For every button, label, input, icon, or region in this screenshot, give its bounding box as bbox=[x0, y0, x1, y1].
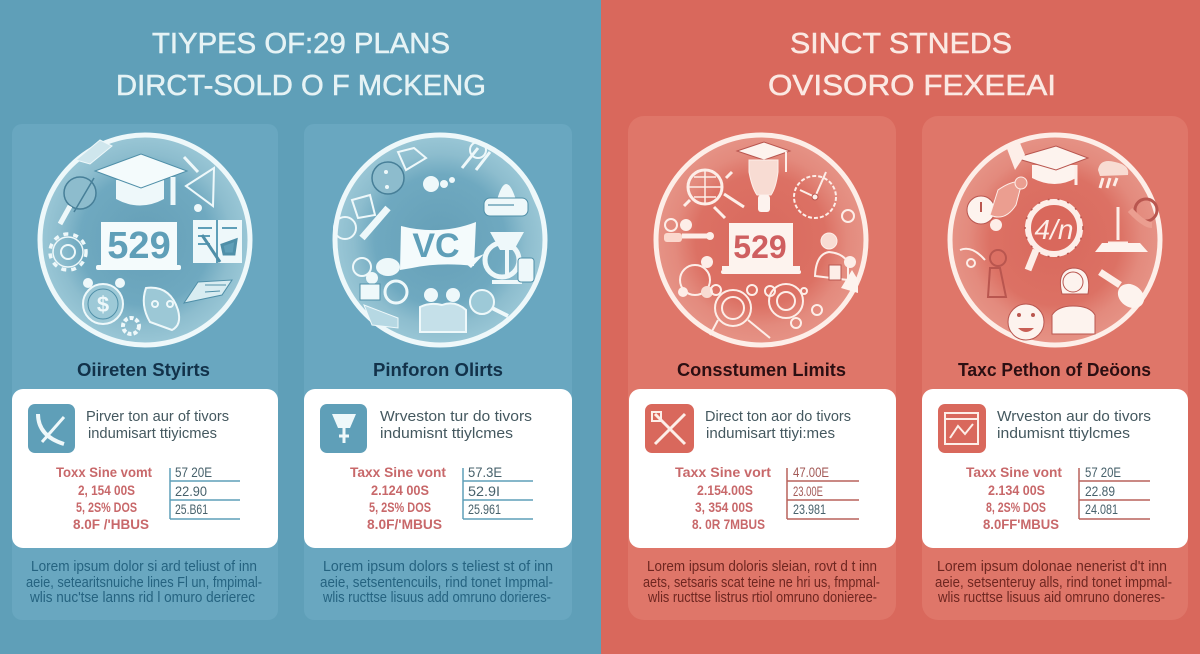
icon: clock wheel bbox=[794, 172, 836, 218]
heading: Consstumen Limits bbox=[677, 360, 846, 380]
mini table: 52.9I bbox=[468, 483, 500, 499]
red background half bbox=[601, 0, 1200, 654]
icon: people and chat bbox=[353, 258, 407, 328]
figures list: 5, 2S% DOS bbox=[369, 499, 431, 515]
icon: magnifier percent bbox=[1025, 199, 1083, 270]
icon: chart window tile bbox=[938, 404, 986, 453]
heading: Oiireten Styirts bbox=[77, 360, 210, 380]
card text bbox=[705, 408, 851, 442]
card text bbox=[86, 408, 229, 442]
icon: dollar coin: $ bbox=[97, 292, 109, 317]
mini table: 22.90 bbox=[175, 483, 207, 499]
title: left: TIYPES OF:29 PLANS bbox=[152, 28, 450, 60]
heading: Pinforon Olirts bbox=[373, 360, 503, 380]
figures list: Toxx Sine vomt bbox=[56, 464, 152, 480]
title: right: OVISORO FEXEEAI bbox=[768, 70, 1056, 102]
mini table bbox=[170, 464, 240, 519]
figures list: 2.134 00S bbox=[988, 482, 1045, 498]
figures list: 2.124 00S bbox=[371, 482, 429, 498]
figures list: Taxx Sine vort bbox=[675, 464, 771, 480]
card text: Pirver ton aur of tivors bbox=[86, 408, 229, 425]
medallion: 529 advisor icons bbox=[656, 135, 866, 345]
description bbox=[643, 559, 880, 606]
icon: people with hand bbox=[664, 219, 714, 242]
panel: advisor-sold 2 bbox=[922, 116, 1188, 620]
mini table bbox=[463, 464, 533, 519]
icon: magnifier percent: 4/n bbox=[1035, 214, 1073, 245]
icon: VC flag: VC bbox=[412, 227, 460, 265]
panel: advisor-sold 1 bbox=[628, 116, 896, 620]
card: details bbox=[12, 389, 278, 548]
icon: monument bbox=[1095, 199, 1157, 252]
icon: cap on bulb bbox=[737, 142, 790, 212]
figures list: 8, 2S% DOS bbox=[986, 499, 1046, 515]
icon: face mascot bbox=[144, 288, 179, 330]
mini table: 25.B61 bbox=[175, 501, 208, 517]
icon: laptop 529 bbox=[96, 222, 181, 270]
figures list bbox=[675, 464, 771, 532]
figures list: 3, 354 00S bbox=[695, 499, 753, 515]
icon: compass triangle bbox=[76, 140, 214, 212]
icon: lens bbox=[470, 290, 508, 316]
heading: Taxc Pethon of Deöons bbox=[958, 360, 1151, 380]
panel: direct-sold 1 bbox=[12, 124, 278, 620]
description: wlis ructtse lisuus add omruno dorieres- bbox=[322, 590, 551, 606]
description: Lorem ipsum dolors s teliest st of inn bbox=[323, 559, 553, 575]
figures list bbox=[966, 464, 1062, 532]
mini table: 47.00E bbox=[793, 464, 829, 480]
icon: gear bbox=[50, 234, 86, 270]
title: left bbox=[116, 28, 486, 102]
card text: Direct ton aor do tivors bbox=[705, 408, 851, 425]
panel: direct-sold 2 bbox=[304, 124, 572, 620]
figures list: 2.154.00S bbox=[697, 482, 753, 498]
card text: indumisart ttiyicmes bbox=[88, 425, 217, 442]
mini table bbox=[787, 464, 859, 519]
figures list: Taxx Sine vont bbox=[966, 464, 1062, 480]
icon: person gear bbox=[765, 284, 822, 328]
card text bbox=[380, 408, 532, 442]
card text: indumisnt ttiylcmes bbox=[380, 425, 513, 442]
card: details bbox=[922, 389, 1188, 548]
icon: phone tile bbox=[28, 404, 75, 453]
icon: globe bbox=[372, 148, 426, 194]
icon: bottle bbox=[1100, 272, 1149, 313]
icon: notebook bbox=[193, 220, 242, 263]
figures list: Taxx Sine vont bbox=[350, 464, 446, 480]
description: wlis nuc'tse lanns rid l omuro derierec bbox=[29, 590, 255, 606]
icon: cluster bbox=[423, 142, 490, 192]
figures list: 5, 2S% DOS bbox=[76, 499, 137, 515]
mini table: 57 20E bbox=[1085, 464, 1121, 480]
medallion: tax icons bbox=[950, 135, 1160, 345]
icon: laptop 529: 529 bbox=[733, 229, 787, 265]
icon: globe network bbox=[684, 170, 744, 218]
icon: woman portrait bbox=[1052, 268, 1095, 334]
icon: clinician bbox=[815, 210, 858, 293]
icon: magnifier gear bbox=[710, 285, 770, 338]
card text: Wrveston aur do tivors bbox=[997, 408, 1151, 425]
mini table: 57 20E bbox=[175, 464, 212, 480]
mini table: 23.981 bbox=[793, 501, 826, 517]
figures list: 2, 154 00S bbox=[78, 482, 135, 498]
description: Lorem ipsum dolor si ard teliust of inn bbox=[31, 559, 257, 575]
description bbox=[320, 559, 553, 606]
figures list: 8.0F /'HBUS bbox=[73, 516, 149, 532]
icon: crossed tools tile bbox=[645, 404, 694, 453]
description: wlis ructtse listrus rtiol omruno donieree- bbox=[647, 590, 877, 606]
title: right bbox=[768, 28, 1056, 102]
description: aeie, setsenteruy alls, rind tonet impmal- bbox=[935, 575, 1172, 591]
description: Lorem ipsum dolonae nenerist d't inn bbox=[937, 559, 1167, 575]
figures list bbox=[350, 464, 446, 532]
title: right: SINCT STNEDS bbox=[790, 28, 1012, 60]
icon: laptop 529 bbox=[721, 223, 801, 274]
description: aeie, setsentencuils, rind tonet Impmal- bbox=[320, 575, 553, 591]
mini table bbox=[1079, 464, 1150, 519]
card text: Wrveston tur do tivors bbox=[380, 408, 532, 425]
icon: small gear bbox=[123, 318, 139, 334]
blue background half bbox=[0, 0, 601, 654]
description: Lorem ipsum doloris sleian, rovt d t inn bbox=[647, 559, 877, 575]
icon: VC flag bbox=[400, 222, 484, 270]
medallion: VC icons bbox=[334, 135, 545, 345]
icon: graduation cap bbox=[1006, 143, 1088, 185]
medallion: 529 education icons bbox=[40, 135, 250, 345]
icon: microscope bbox=[485, 232, 534, 282]
card text bbox=[997, 408, 1151, 442]
card: details bbox=[629, 389, 896, 548]
title: left: DIRCT-SOLD O F MCKENG bbox=[116, 70, 486, 102]
card text: indumisart ttiyi:mes bbox=[706, 425, 835, 442]
icon: smiling face bbox=[1008, 304, 1044, 340]
mini table: 57.3E bbox=[468, 464, 502, 480]
icon: dollar coin bbox=[83, 278, 125, 324]
mini table: 25.961 bbox=[468, 501, 501, 517]
icon: lamp tile bbox=[320, 404, 367, 453]
mini table: 22.89 bbox=[1085, 483, 1115, 499]
description bbox=[935, 559, 1172, 606]
icon: two people bbox=[420, 288, 466, 332]
description bbox=[26, 559, 262, 606]
icon: clock and sack bbox=[967, 177, 1027, 231]
mini table: 24.081 bbox=[1085, 501, 1118, 517]
icon: open book bbox=[184, 280, 232, 303]
icon: laptop 529: 529 bbox=[107, 225, 171, 267]
icon: pen and tool bbox=[334, 195, 388, 239]
mini table: 23.00E bbox=[793, 483, 823, 499]
description: aeie, setearitsnuiche lines Fl un, fmpimal- bbox=[26, 575, 262, 591]
icon: figure bbox=[960, 249, 1006, 297]
icon: rain cloud bbox=[1098, 161, 1128, 188]
icon: magnifier bbox=[60, 177, 96, 224]
card: details bbox=[304, 389, 572, 548]
figures list bbox=[56, 464, 152, 532]
figures list: 8.0FF'MBUS bbox=[983, 516, 1059, 532]
figures list: 8. 0R 7MBUS bbox=[692, 516, 765, 532]
icon: molecule bbox=[678, 256, 713, 298]
figures list: 8.0F/'MBUS bbox=[367, 516, 442, 532]
description: wlis ructtse lisuus aid omruno doneres- bbox=[937, 590, 1165, 606]
icon: graduation cap bbox=[95, 154, 187, 206]
card text: indumisnt ttiylcmes bbox=[997, 425, 1130, 442]
icon: sofa stack bbox=[484, 180, 540, 216]
description: aets, setsaris scat teine ne hri us, fmpmal- bbox=[643, 575, 880, 591]
